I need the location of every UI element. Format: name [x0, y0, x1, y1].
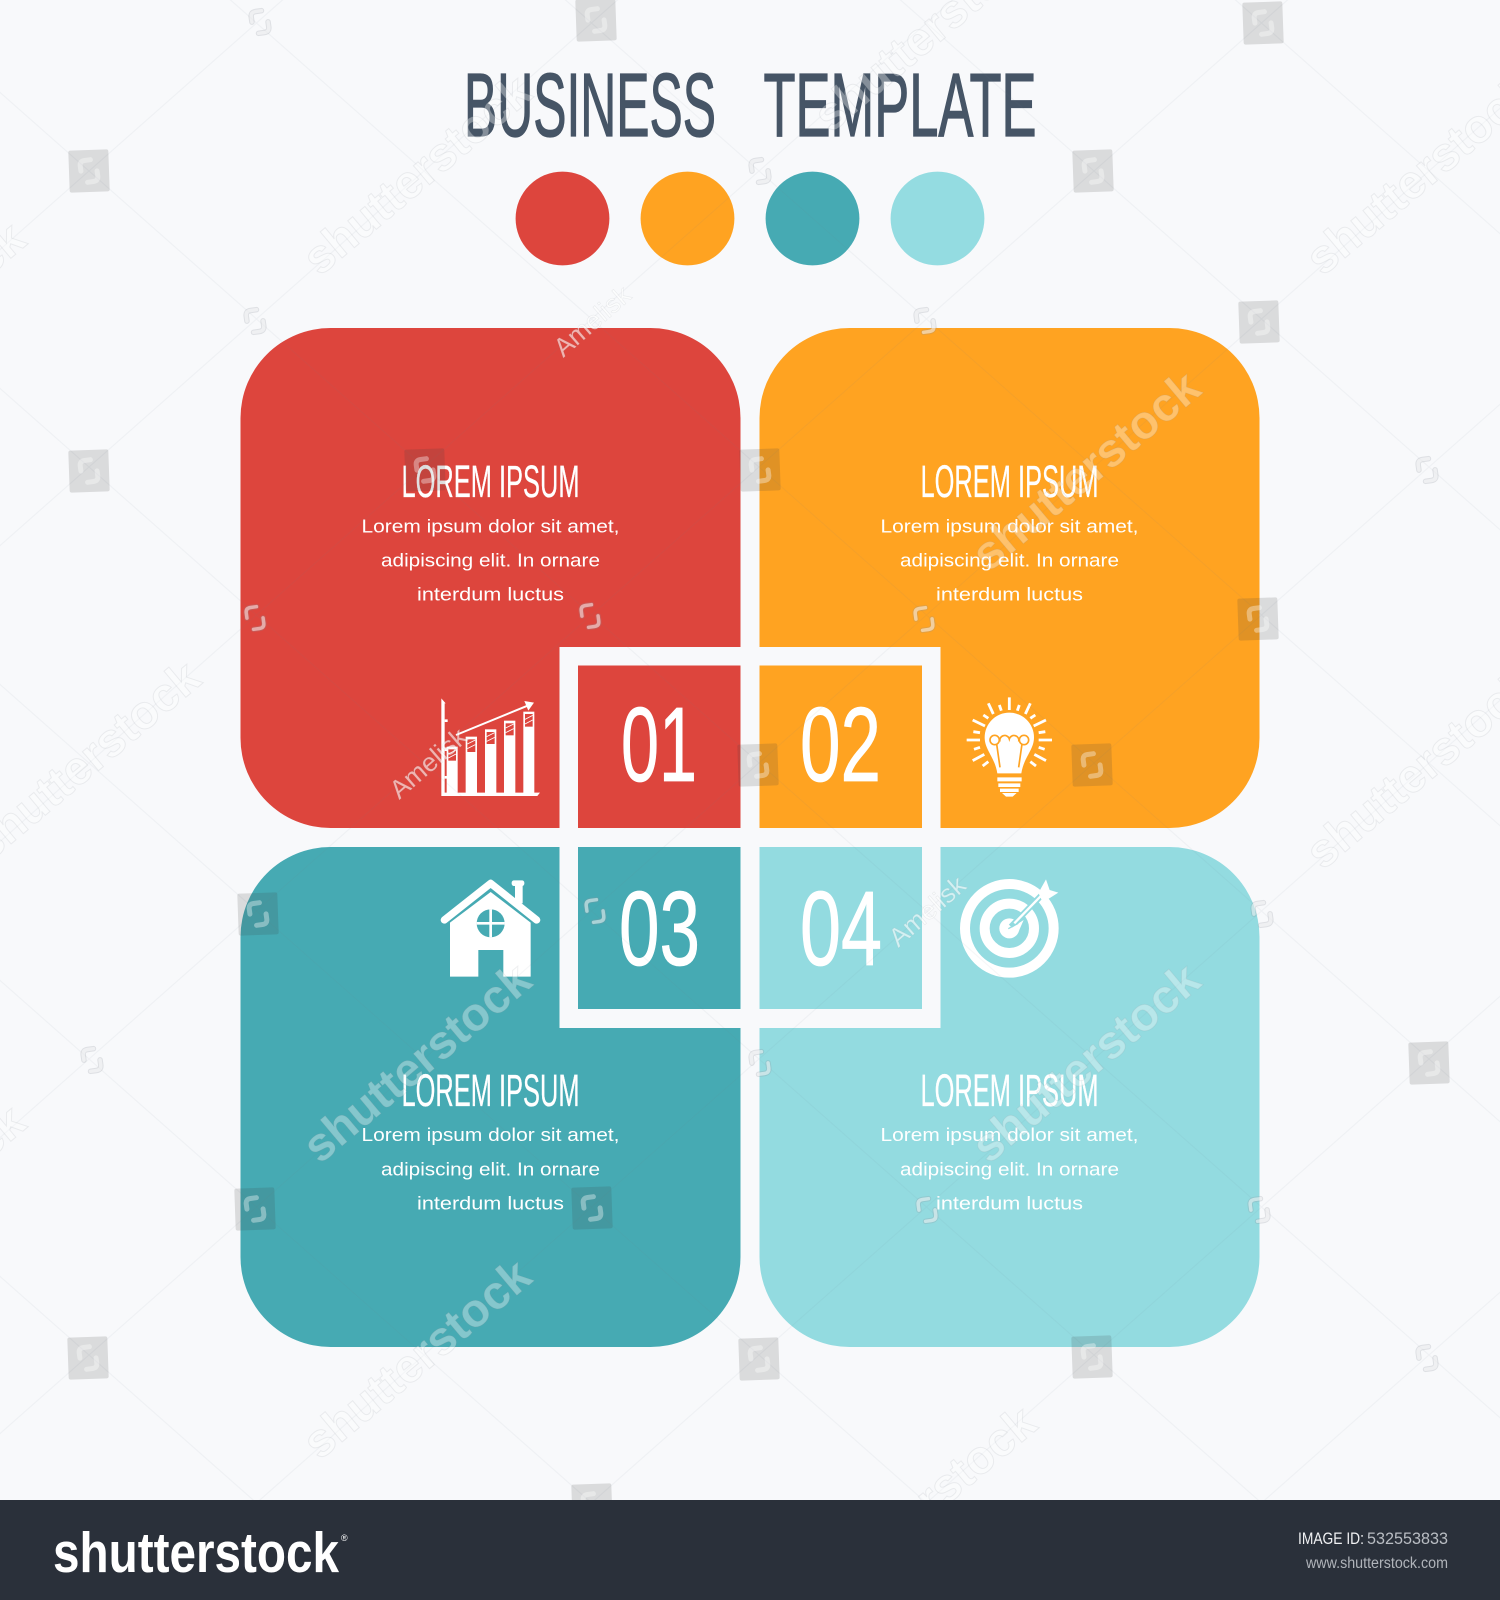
- icon: bar chart: [441, 698, 540, 796]
- panel: bottom right light blue: [760, 847, 1260, 1347]
- panel heading: LOREM IPSUM: [920, 456, 1098, 507]
- footer logo: shutterstock: [53, 1521, 339, 1585]
- panel heading: LOREM IPSUM: [402, 1065, 580, 1116]
- watermark: diagonal shutterstock text: shutterstock: [292, 1247, 541, 1468]
- watermark: diagonal shutterstock text: shutterstock: [961, 359, 1210, 580]
- watermark: contributor name: Amelisk: [383, 721, 473, 804]
- number tile 03: [578, 847, 740, 1009]
- watermark: outline marks: [83, 10, 1436, 1370]
- colour legend dots: [516, 172, 984, 265]
- number tile 02: 02: [800, 686, 881, 804]
- number tile 03: 03: [619, 870, 700, 988]
- watermark: diagonal shutterstock text: shutterstock: [961, 951, 1210, 1172]
- panel body text: Lorem ipsum dolor sit amet,: [362, 516, 620, 536]
- panel body text: [362, 1124, 620, 1214]
- panel body text: adipiscing elit. In ornare: [381, 550, 600, 570]
- panel body text: interdum luctus: [417, 1192, 564, 1214]
- panel: top left red: [240, 328, 740, 828]
- panel body text: adipiscing elit. In ornare: [381, 1158, 600, 1180]
- panel body text: interdum luctus: [417, 584, 564, 604]
- panel body text: Lorem ipsum dolor sit amet,: [880, 1124, 1138, 1145]
- panel body text: Lorem ipsum dolor sit amet,: [362, 1124, 620, 1145]
- watermark: diagonal shutterstock text: shutterstock: [292, 951, 541, 1172]
- panel body text: [362, 516, 620, 604]
- panel body text: adipiscing elit. In ornare: [900, 1158, 1119, 1180]
- watermark: contributor name: Amelisk: [547, 279, 637, 362]
- watermark: diagonal shutterstock text: shutterstock: [292, 63, 541, 284]
- footer website: www.shutterstock.com: [1305, 1555, 1448, 1572]
- number tile 01: [578, 666, 740, 828]
- panel: top right orange: [760, 328, 1260, 828]
- panel body text: [880, 1124, 1138, 1214]
- footer image id: [1298, 1530, 1448, 1548]
- panel body text: interdum luctus: [936, 584, 1083, 604]
- icon: house: [444, 880, 537, 977]
- title: TEMPLATE: [764, 56, 1036, 156]
- title: BUSINESS: [464, 56, 716, 156]
- footer registered mark: ®: [341, 1533, 348, 1543]
- panel heading: LOREM IPSUM: [920, 1065, 1098, 1116]
- footer bar: [0, 1500, 1500, 1600]
- footer image id: IMAGE ID:: [1298, 1530, 1364, 1548]
- number tile 01: 01: [621, 686, 697, 804]
- panel: bottom left teal: [240, 847, 740, 1347]
- panel heading: LOREM IPSUM: [402, 456, 580, 507]
- panel body text: interdum luctus: [936, 1192, 1083, 1214]
- centre frame: [560, 647, 940, 1028]
- watermark: contributor name: Amelisk: [882, 869, 972, 952]
- icon: light bulb: [967, 697, 1052, 797]
- watermark: contributor name: [383, 279, 972, 952]
- panel body text: adipiscing elit. In ornare: [900, 550, 1119, 570]
- number tile 04: 04: [800, 870, 882, 988]
- footer image id: 532553833: [1367, 1530, 1448, 1548]
- icon: target with arrow: [965, 879, 1058, 973]
- panel body text: [880, 516, 1138, 604]
- number tile 04: [760, 847, 922, 1009]
- number tile 02: [760, 666, 922, 828]
- panel body text: Lorem ipsum dolor sit amet,: [880, 516, 1138, 536]
